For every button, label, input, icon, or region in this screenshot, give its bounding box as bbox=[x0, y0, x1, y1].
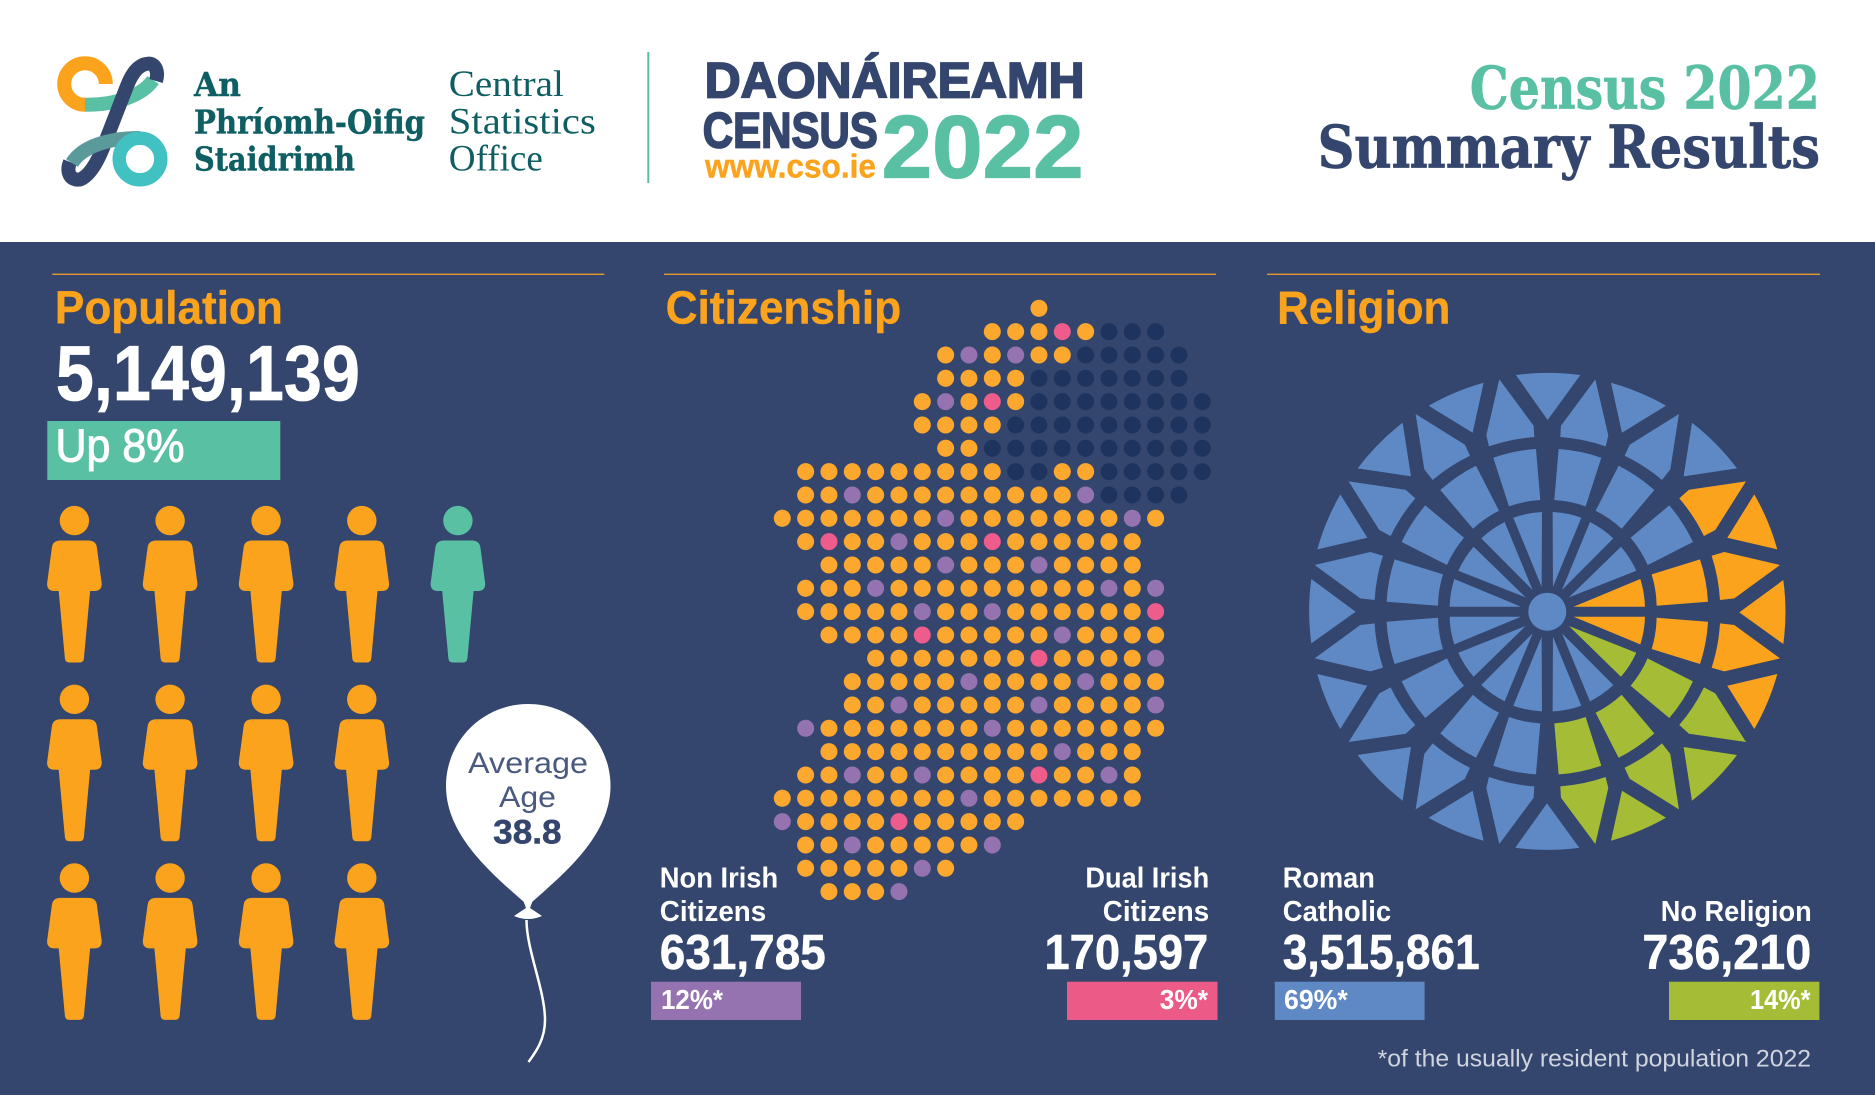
header divider bbox=[647, 52, 649, 183]
stat: dual Irish citizens bbox=[1044, 863, 1218, 1020]
logo text: English name: Central bbox=[449, 64, 564, 105]
dot map of Ireland bbox=[782, 308, 1203, 892]
stat: Roman Catholic bbox=[1275, 863, 1480, 1020]
stat: Roman Catholic: 3,515,861 bbox=[1283, 926, 1480, 980]
stat: dual Irish citizens: Dual Irish bbox=[1085, 863, 1209, 895]
logo: CSO mark bbox=[64, 63, 161, 180]
balloon: average age bbox=[446, 704, 610, 1062]
population figure: 5,149,139 bbox=[56, 329, 360, 417]
header band bbox=[0, 0, 1875, 242]
logo text: Irish name: Staidrimh bbox=[194, 140, 355, 179]
stat: dual Irish citizens: 170,597 bbox=[1044, 926, 1208, 980]
badge: Up 8%: Up 8% bbox=[56, 420, 184, 472]
stat: no religion: No Religion bbox=[1661, 896, 1812, 928]
heading: Religion: Religion bbox=[1277, 281, 1450, 333]
logo text: Irish name bbox=[193, 65, 425, 179]
stat: non Irish citizens: Citizens bbox=[660, 896, 766, 928]
stat: dual Irish citizens: 3%* bbox=[1160, 984, 1208, 1015]
census logo wordmark: CENSUS bbox=[703, 102, 878, 158]
stat: Roman Catholic: Catholic bbox=[1283, 896, 1391, 928]
balloon: average age: Average bbox=[468, 747, 588, 780]
stat: non Irish citizens: 631,785 bbox=[660, 926, 826, 980]
logo text: English name bbox=[449, 64, 596, 180]
stat: Roman Catholic: 69%* bbox=[1284, 984, 1348, 1015]
stat: no religion: 14%* bbox=[1750, 984, 1811, 1015]
stat: non Irish citizens: 12%* bbox=[661, 984, 723, 1015]
census logo wordmark: 2022 bbox=[882, 96, 1084, 196]
logo text: Irish name: Phríomh-Oifig bbox=[194, 102, 425, 141]
panel: population bbox=[47, 274, 611, 1062]
logo text: Irish name: An bbox=[193, 65, 241, 104]
heading: Population: Population bbox=[55, 281, 283, 333]
heading: Citizenship: Citizenship bbox=[666, 281, 901, 333]
census logo wordmark: www.cso.ie bbox=[704, 148, 876, 185]
census logo wordmark: DAONÁIREAMH bbox=[705, 53, 1085, 109]
panel: citizenship bbox=[651, 274, 1218, 1020]
stat: non Irish citizens: Non Irish bbox=[660, 863, 778, 895]
stat: non Irish citizens bbox=[651, 863, 826, 1020]
balloon: average age: 38.8 bbox=[493, 814, 562, 852]
logo text: English name: Statistics bbox=[449, 101, 596, 142]
stat: no religion bbox=[1642, 896, 1819, 1020]
panel: religion bbox=[1267, 274, 1820, 1073]
rose window chart bbox=[1309, 373, 1785, 850]
census logo wordmark bbox=[703, 53, 1085, 196]
stat: Roman Catholic: Roman bbox=[1283, 863, 1375, 895]
stat: no religion: 736,210 bbox=[1642, 926, 1811, 980]
background: navy body panel bbox=[0, 242, 1875, 1095]
badge: Up 8% bbox=[47, 420, 280, 480]
pictogram: people, one in thirteen green bbox=[47, 506, 485, 1020]
footnote: *of the usually resident population 2022 bbox=[1378, 1046, 1811, 1073]
title bbox=[1318, 53, 1820, 182]
balloon: average age: Age bbox=[499, 781, 556, 814]
stat: dual Irish citizens: Citizens bbox=[1103, 896, 1209, 928]
logo text: English name: Office bbox=[449, 139, 543, 180]
